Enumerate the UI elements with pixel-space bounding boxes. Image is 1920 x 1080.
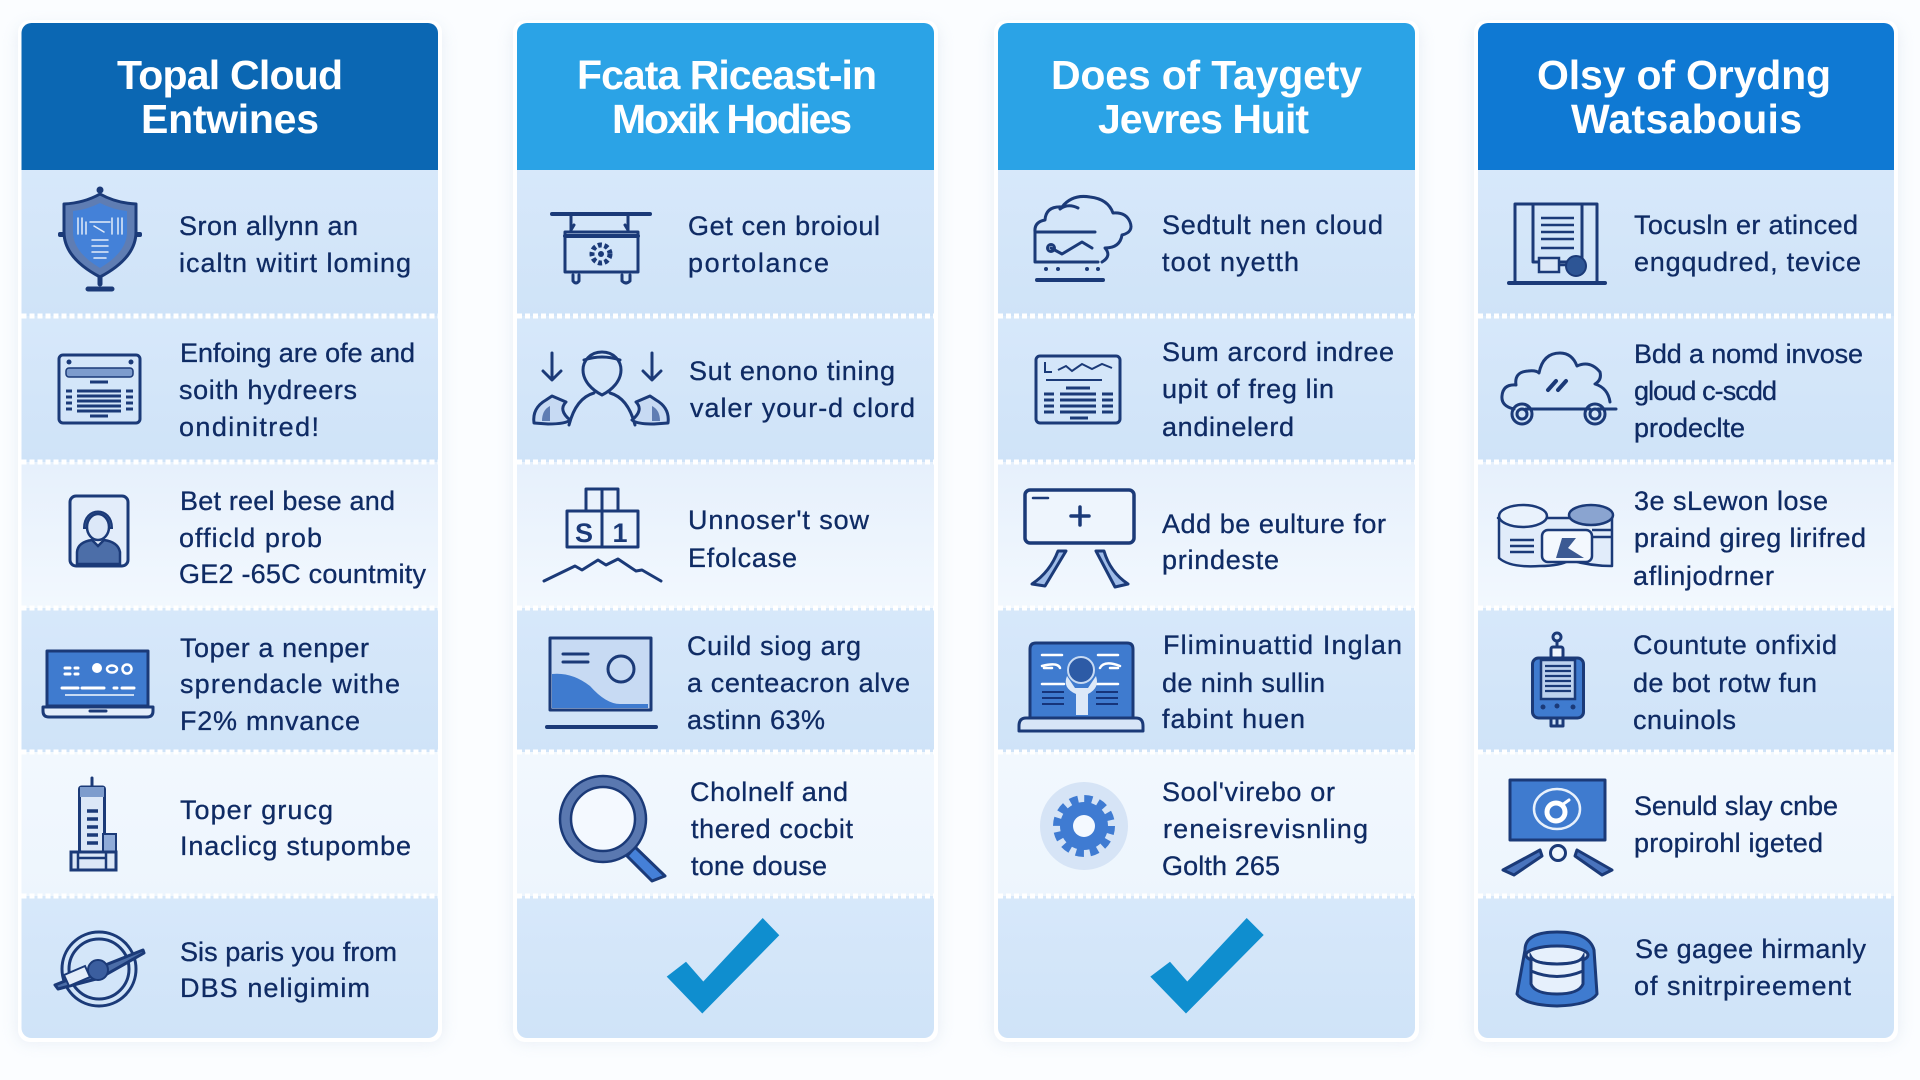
row: Fliminuattid Inglan: [998, 608, 1415, 752]
text: de bot rotw fun: [1633, 668, 1817, 698]
heading: Fcata Riceast-in Moxik Hodies: [517, 23, 934, 170]
text: [179, 486, 426, 589]
icon: S1 boxes over mountain line: [544, 489, 661, 581]
text: Cuild siog arg: [687, 631, 861, 661]
row: Bet reel bese and: [22, 462, 438, 608]
text: Enfoing are ofe and: [180, 338, 415, 368]
row: Bdd a nomd invose: [1478, 316, 1894, 462]
icon: person portrait: [70, 496, 128, 566]
text: [1633, 630, 1837, 735]
icon: propeller dial: [55, 932, 144, 1006]
text: DBS neligimim: [180, 973, 370, 1003]
text: a centeacron alve: [687, 668, 910, 698]
icon: board with plus: [1025, 490, 1134, 587]
text: [179, 211, 411, 278]
text: Add be eulture for: [1162, 509, 1386, 539]
text: tone douse: [691, 851, 827, 881]
text: valer your-d clord: [690, 393, 915, 423]
text: Sut enono tining: [689, 356, 895, 386]
heading: Olsy of Orydng Watsabouis: [1478, 23, 1894, 170]
icon: device: [1532, 633, 1584, 726]
icon: shield: [58, 186, 142, 289]
row: Sool'virebo or: [998, 752, 1415, 896]
row: Add be eulture for: [998, 462, 1415, 608]
icon: data panel: [1036, 356, 1120, 423]
text: Toper grucg: [180, 795, 333, 825]
text: [1634, 791, 1838, 858]
text: officld prob: [179, 523, 322, 553]
heading: Topal Cloud Entwines: [22, 23, 438, 170]
text: reneisrevisnling: [1163, 814, 1368, 844]
row: Get cen broioul: [517, 170, 934, 316]
heading: Does of Taygety Jevres Huit: [998, 23, 1415, 170]
row: Enfoing are ofe and: [22, 316, 438, 462]
text: [1162, 777, 1368, 881]
text: Cholnelf and: [690, 777, 848, 807]
text: [1634, 210, 1861, 277]
row: 3e sLewon lose: [1478, 462, 1894, 608]
text: 3e sLewon lose: [1634, 486, 1828, 516]
icon: S1 boxes over mountain line: 1: [612, 518, 628, 548]
text: cnuinols: [1633, 705, 1736, 735]
text: F2% mnvance: [180, 706, 360, 736]
row: Sum arcord indree: [998, 316, 1415, 462]
text: soith hydreers: [179, 375, 357, 405]
text: fabint huen: [1162, 704, 1305, 734]
text: [688, 211, 880, 278]
heading: Olsy of Orydng Watsabouis: Olsy of Orydng: [1537, 52, 1831, 98]
icon: document frame: [1509, 204, 1605, 283]
icon: laptop with wrench: [1019, 643, 1143, 731]
text: [180, 937, 397, 1003]
text: Countute onfixid: [1633, 630, 1837, 660]
icon: dashboard panel: [59, 355, 140, 423]
row: checkmark: [998, 896, 1415, 1038]
text: [688, 505, 870, 573]
text: [1162, 210, 1383, 277]
row: Senuld slay cnbe: [1478, 752, 1894, 896]
heading: Does of Taygety Jevres Huit: Does of Taygety: [1051, 52, 1362, 98]
text: [180, 795, 411, 861]
panel: Fcata Riceast-in Moxik Hodies: [511, 20, 940, 1044]
icon: monitor with eye: [1503, 780, 1612, 875]
icon: tower: [71, 778, 116, 870]
text: [687, 631, 910, 735]
row: checkmark: [517, 896, 934, 1038]
text: praind gireg lirifred: [1634, 523, 1866, 553]
text: upit of freg lin: [1162, 374, 1334, 404]
text: [180, 633, 400, 736]
text: [1633, 486, 1866, 591]
row: Sron allynn an: [22, 170, 438, 316]
heading: Does of Taygety Jevres Huit: Jevres Huit: [1098, 96, 1309, 142]
text: prindeste: [1162, 545, 1279, 575]
icon: cylinders and scroll: [1498, 505, 1613, 566]
text: Tocusln er atinced: [1634, 210, 1858, 240]
panel: Topal Cloud Entwines: [16, 20, 444, 1044]
text: propirohl igeted: [1634, 828, 1823, 858]
icon: laptop: [43, 651, 153, 717]
text: astinn 63%: [687, 705, 825, 735]
text: prodeclte: [1634, 413, 1745, 443]
text: engqudred, tevice: [1634, 247, 1861, 277]
text: [689, 356, 915, 423]
icon: cloud on wheels: [1502, 353, 1616, 424]
icon: person with bags and arrows: [534, 352, 668, 425]
text: [1634, 934, 1866, 1001]
text: Senuld slay cnbe: [1634, 791, 1838, 821]
text: thered cocbit: [691, 814, 853, 844]
text: aflinjodrner: [1633, 561, 1774, 591]
row: Tocusln er atinced: [1478, 170, 1894, 316]
text: portolance: [688, 248, 829, 278]
text: of snitrpireement: [1634, 971, 1851, 1001]
icon: landscape picture: [547, 638, 656, 727]
text: Sum arcord indree: [1162, 337, 1394, 367]
icon: cloud with chart: [1035, 196, 1131, 280]
text: sprendacle withe: [180, 669, 400, 699]
text: Fliminuattid Inglan: [1163, 630, 1402, 660]
text: icaltn witirt loming: [179, 248, 411, 278]
icon: database bowl: [1517, 932, 1597, 1006]
text: toot nyetth: [1162, 247, 1299, 277]
panel: Olsy of Orydng Watsabouis: [1472, 20, 1900, 1044]
text: Unnoser't sow: [688, 505, 870, 535]
icon: check mark: [1150, 918, 1264, 1014]
icon: check mark: [667, 918, 779, 1014]
text: [179, 338, 415, 442]
text: [1162, 509, 1386, 575]
text: Efolcase: [688, 543, 797, 573]
icon: magnifier: [560, 776, 665, 881]
text: Sool'virebo or: [1162, 777, 1335, 807]
heading: Topal Cloud Entwines: Entwines: [141, 96, 319, 142]
text: ondinitred!: [179, 412, 319, 442]
text: Bet reel bese and: [180, 486, 395, 516]
text: [690, 777, 853, 881]
text: de ninh sullin: [1162, 668, 1325, 698]
row: Sis paris you from: [22, 896, 438, 1038]
row: Unnoser't sow: [517, 462, 934, 608]
row: Toper grucg: [22, 752, 438, 896]
row: Countute onfixid: [1478, 608, 1894, 752]
icon: gear: [1040, 782, 1128, 870]
row: Cholnelf and: [517, 752, 934, 896]
text: Toper a nenper: [180, 633, 369, 663]
heading: Olsy of Orydng Watsabouis: Watsabouis: [1571, 96, 1802, 142]
row: Sut enono tining: [517, 316, 934, 462]
text: [1634, 339, 1863, 443]
text: Inaclicg stupombe: [180, 831, 411, 861]
text: GE2 -65C countmity: [179, 559, 426, 589]
text: Se gagee hirmanly: [1635, 934, 1866, 964]
icon: hanging sign with gear: [552, 214, 650, 283]
text: Sis paris you from: [180, 937, 397, 967]
panel: Does of Taygety Jevres Huit: [992, 20, 1421, 1044]
heading: Topal Cloud Entwines: Topal Cloud: [117, 52, 343, 98]
row: Cuild siog arg: [517, 608, 934, 752]
text: andinelerd: [1162, 412, 1294, 442]
icon: S1 boxes over mountain line: S: [575, 518, 593, 548]
text: Bdd a nomd invose: [1634, 339, 1863, 369]
text: gloud c-scdd: [1634, 376, 1777, 406]
heading: Fcata Riceast-in Moxik Hodies: Moxik Hodies: [612, 96, 852, 142]
text: Sron allynn an: [179, 211, 358, 241]
row: Sedtult nen cloud: [998, 170, 1415, 316]
text: [1162, 337, 1394, 442]
text: [1162, 630, 1402, 734]
row: Se gagee hirmanly: [1478, 896, 1894, 1038]
text: Golth 265: [1162, 851, 1280, 881]
row: Toper a nenper: [22, 608, 438, 752]
text: Sedtult nen cloud: [1162, 210, 1383, 240]
heading: Fcata Riceast-in Moxik Hodies: Fcata Riceast-in: [577, 52, 877, 98]
text: Get cen broioul: [688, 211, 880, 241]
